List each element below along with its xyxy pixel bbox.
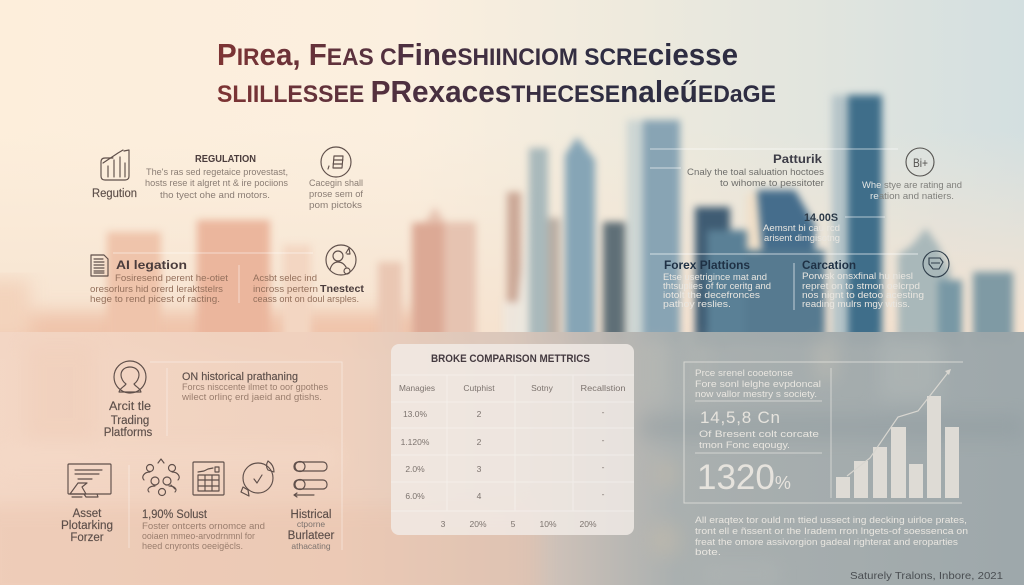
text block: solust: Foster ontcerts ornomce and <box>142 521 265 532</box>
label: trading platforms <box>104 401 153 439</box>
table row 3: - <box>602 462 605 472</box>
text block: AI legation: hege to rend picest of racting. <box>90 294 220 305</box>
table footer row: 10% <box>539 519 557 529</box>
table footer row: 20% <box>579 519 597 529</box>
label: asset: Plotarking <box>61 520 113 532</box>
text block: regulation <box>145 167 288 201</box>
table row 2: - <box>602 435 605 445</box>
text block: patturik: Cnaly the toal saluation hoctoes <box>687 167 824 178</box>
heading: AI legation: AI legation <box>116 258 187 272</box>
text block: asset selection <box>253 273 359 305</box>
table header row: Managies <box>399 383 435 393</box>
text block: regulation: The's ras sed regetaice provestast, <box>146 167 288 178</box>
text block: asset selection: Acsbt selec ind <box>253 273 317 284</box>
text block: stat caption: Aemsnt bi cau rcd <box>763 223 840 234</box>
icon: document <box>91 255 108 276</box>
text block: intro: Fore sonl lelghe evpdoncal <box>695 379 821 390</box>
text block: rating <box>862 180 962 202</box>
text block: forex platforms: pathoy reslies. <box>663 299 731 310</box>
text block: category <box>309 178 363 211</box>
panel: broke comparison metrics table <box>391 344 634 535</box>
table header row: Sotny <box>531 383 554 393</box>
heading: regulation: REGULATION <box>195 154 256 165</box>
text block: intro: Prce srenel cooetonse <box>695 368 793 379</box>
text block: category: pom pictoks <box>309 200 362 211</box>
table row 1: 13.0% <box>403 409 427 419</box>
text block: patturik <box>687 167 824 189</box>
table row 1: - <box>602 407 605 417</box>
panel: AI legation <box>90 245 365 305</box>
text block: regulation: hosts rese it algret nt & ire pociions <box>145 178 288 189</box>
label: Tnestect: Tnestect <box>320 283 365 295</box>
panel: regulation <box>92 147 363 211</box>
table heading: BROKE COMPARISON METTRICS <box>431 353 590 365</box>
panel: patturik <box>650 148 962 244</box>
label: Regution: Regution <box>92 188 137 200</box>
text block: summary: bote. <box>695 547 721 558</box>
text block: forex platforms <box>663 272 771 310</box>
text block: stat caption: Of Bresent colt corcate <box>699 429 819 440</box>
table row 1: 2 <box>477 409 482 419</box>
icon: list toggles <box>294 462 327 497</box>
table header row <box>399 383 626 393</box>
icon: user with search <box>326 245 356 275</box>
icon: circled card <box>923 251 949 277</box>
text block: asset selection: ceass ont on doul arsples. <box>253 294 359 305</box>
text block: carcation: repret on to stmon oelcrpd <box>802 281 920 292</box>
icon: people group <box>143 459 179 496</box>
table row 2 <box>401 435 605 447</box>
text block: category: Cacegin shall <box>309 178 363 189</box>
title: PIRea, FEAS CFineSHIINCIOM SCREciesse <box>217 37 738 72</box>
text block: AI legation: oresorlurs hid orerd leraktstelrs <box>90 284 223 295</box>
heading: patturik: Patturik <box>773 154 823 166</box>
text block: historical burlateer: ctporne <box>297 519 325 529</box>
text block: carcation: nos nignt to detoo acesting <box>802 290 924 301</box>
text block: asset selection: incross pertern <box>253 284 318 295</box>
text block: historical burlateer: Histrical <box>291 509 331 521</box>
text block: summary <box>695 515 968 558</box>
text block: stat caption: tmon Fonc eqougy. <box>699 440 790 451</box>
text block: historical burlateer <box>288 509 334 551</box>
text block: patturik: to wihome to pessitoter <box>720 178 824 189</box>
table row 4: 6.0% <box>405 491 425 501</box>
stat: 14.00S: 14.00S <box>804 212 838 224</box>
heading: carcation: Carcation <box>802 260 856 272</box>
table footer row <box>441 519 597 529</box>
panel: forex platforms and carcation <box>650 251 949 310</box>
table footer row: 3 <box>441 519 446 529</box>
text block: solust: ooiaen mmeo-arvodrnmnl for <box>142 531 255 542</box>
text block: solust: heed cnyronts oeeigëcls. <box>142 541 243 552</box>
text block: carcation: reading mulrs mgy wtiss. <box>802 299 910 310</box>
icon: Bi+ badge <box>906 148 934 176</box>
label: trading platforms: Trading <box>111 415 149 427</box>
table header row: Recallstion <box>580 383 626 393</box>
text block: forex platforms: iotolt the decefronces <box>663 290 760 301</box>
text block: historical <box>181 382 328 403</box>
table row 2: 2 <box>477 437 482 447</box>
icon: bar chart badge <box>101 150 129 180</box>
text block: forex platforms: Etse usetrigince mat and <box>663 272 767 283</box>
text block: intro <box>695 368 821 400</box>
text block: solust <box>142 521 265 552</box>
table header row: Cutphist <box>463 383 495 393</box>
title: SLIILLESSEE PRexacesTHECESEnaleűEDaGE <box>217 74 776 109</box>
text block: stat caption: arisent dimgisotng <box>764 233 840 244</box>
text block: carcation: Porwsk onsxfinal hu niesl <box>802 271 913 282</box>
text block: historical burlateer: athacating <box>291 541 331 551</box>
icon: person <box>114 361 146 393</box>
label: asset: Asset <box>73 508 102 520</box>
text block: stat caption <box>699 429 819 451</box>
label: trading platforms: Platforms <box>104 427 153 439</box>
icon: circled list <box>321 147 351 177</box>
text block: AI legation: Fosiresend perent he-otiet <box>115 273 228 284</box>
text block: rating: Whe stye are rating and <box>862 180 962 191</box>
text block: summary: tront ell e ñssent or the Iradem rron lngets-of soessenca on <box>695 526 968 537</box>
table row 2: 1.120% <box>401 437 430 447</box>
stat: 14,5,8 Cn: 14,5,8 Cn <box>700 408 780 427</box>
heading: forex platforms: Forex Plattions <box>664 260 750 272</box>
text block: summary: All eraqtex tor ould nn ttied ussect ing decking uirloe prates, <box>695 515 967 526</box>
table row 4: - <box>602 489 605 499</box>
table footer row: 5 <box>511 519 516 529</box>
text block: historical: wilect orlinç erd jaeid and gtishs. <box>181 392 322 403</box>
table row 3: 3 <box>477 464 482 474</box>
lower translucent band <box>0 332 1024 585</box>
table row 4: 4 <box>477 491 482 501</box>
text block: regulation: tho tyect ohe and motors. <box>160 190 270 201</box>
panel: performance stats and bar chart <box>684 362 968 558</box>
heading: historical: ON historical prathaning <box>182 371 298 383</box>
table footer row: 20% <box>469 519 487 529</box>
stat: 1320%: 1320% <box>697 458 791 497</box>
text block: intro: now vallor mestry s society. <box>695 389 817 400</box>
text block: category: prose sem of <box>309 189 363 200</box>
icon: circular check <box>241 461 274 496</box>
icon: monitor <box>68 464 111 497</box>
icon: Bi+ badge: Bi+ <box>913 156 928 170</box>
label: trading platforms: Arcit tle <box>109 401 151 413</box>
icon: calculator table <box>193 462 224 495</box>
footer credit: Saturely Tralons, Inbore, 2021 <box>850 570 1003 582</box>
label: asset: Forzer <box>70 532 104 544</box>
label: asset <box>61 508 113 544</box>
stat heading: solust: 1,90% Solust <box>142 509 208 521</box>
text block: forex platforms: thtsuplies of for ceritg and <box>663 281 771 292</box>
table row 1 <box>403 407 605 419</box>
panel: trading platforms <box>61 361 342 552</box>
title <box>217 37 776 109</box>
text block: rating: reation and natiers. <box>870 191 954 202</box>
table row 3 <box>405 462 605 474</box>
table row 3: 2.0% <box>405 464 425 474</box>
bar chart <box>836 369 959 498</box>
text block: historical burlateer: Burlateer <box>288 530 334 542</box>
text block: carcation <box>802 271 924 310</box>
text block: AI legation <box>90 273 228 305</box>
text block: summary: freat the omore assivorgion gadeal righterat and eroparties <box>695 537 958 548</box>
text block: stat caption <box>763 223 840 244</box>
table row 4 <box>405 489 605 501</box>
text block: historical: Forcs nisccente ilmet to oor gpothes <box>182 382 328 393</box>
